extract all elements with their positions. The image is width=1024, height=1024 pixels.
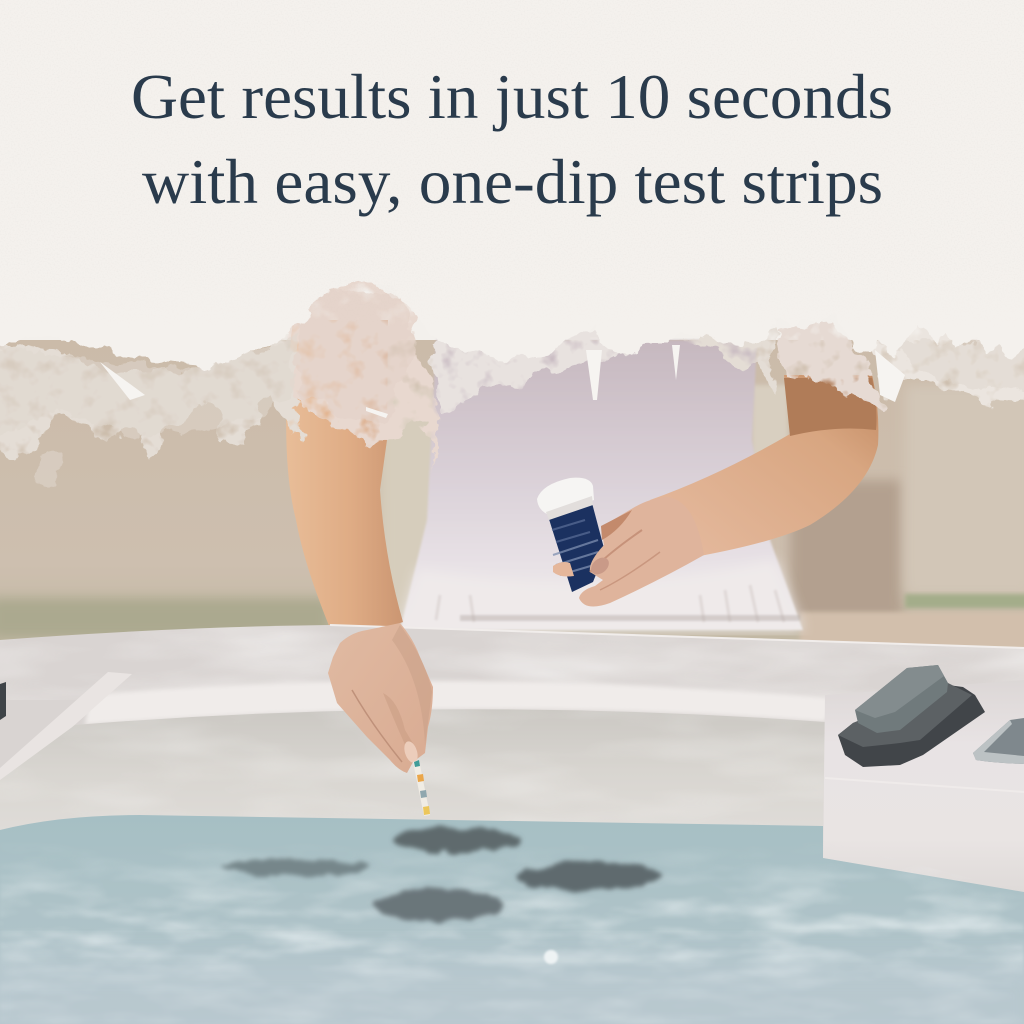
- torn paper header: [0, 0, 1024, 368]
- background wall: [0, 340, 1024, 650]
- torn paper solid under-layer: [0, 285, 1024, 487]
- torn paper texture layer: [0, 282, 1024, 470]
- hand dipping strip: [328, 623, 433, 773]
- test strip vial: [537, 478, 605, 592]
- title line 2: with easy, one-dip test strips: [142, 146, 883, 217]
- test strip: [413, 760, 430, 816]
- title: [131, 61, 893, 217]
- jet control button: [838, 665, 985, 767]
- right arm holding vial: [650, 375, 878, 556]
- title line 1: Get results in just 10 seconds: [131, 61, 893, 132]
- paper flecks: [100, 345, 905, 418]
- left arm reaching down: [286, 320, 403, 645]
- hand holding vial: [553, 497, 704, 607]
- paper grain: [0, 0, 1024, 330]
- person shirt: [400, 340, 803, 630]
- spa water: [0, 815, 1024, 1024]
- spa tub shell: [0, 625, 1024, 900]
- second control button: [973, 718, 1024, 764]
